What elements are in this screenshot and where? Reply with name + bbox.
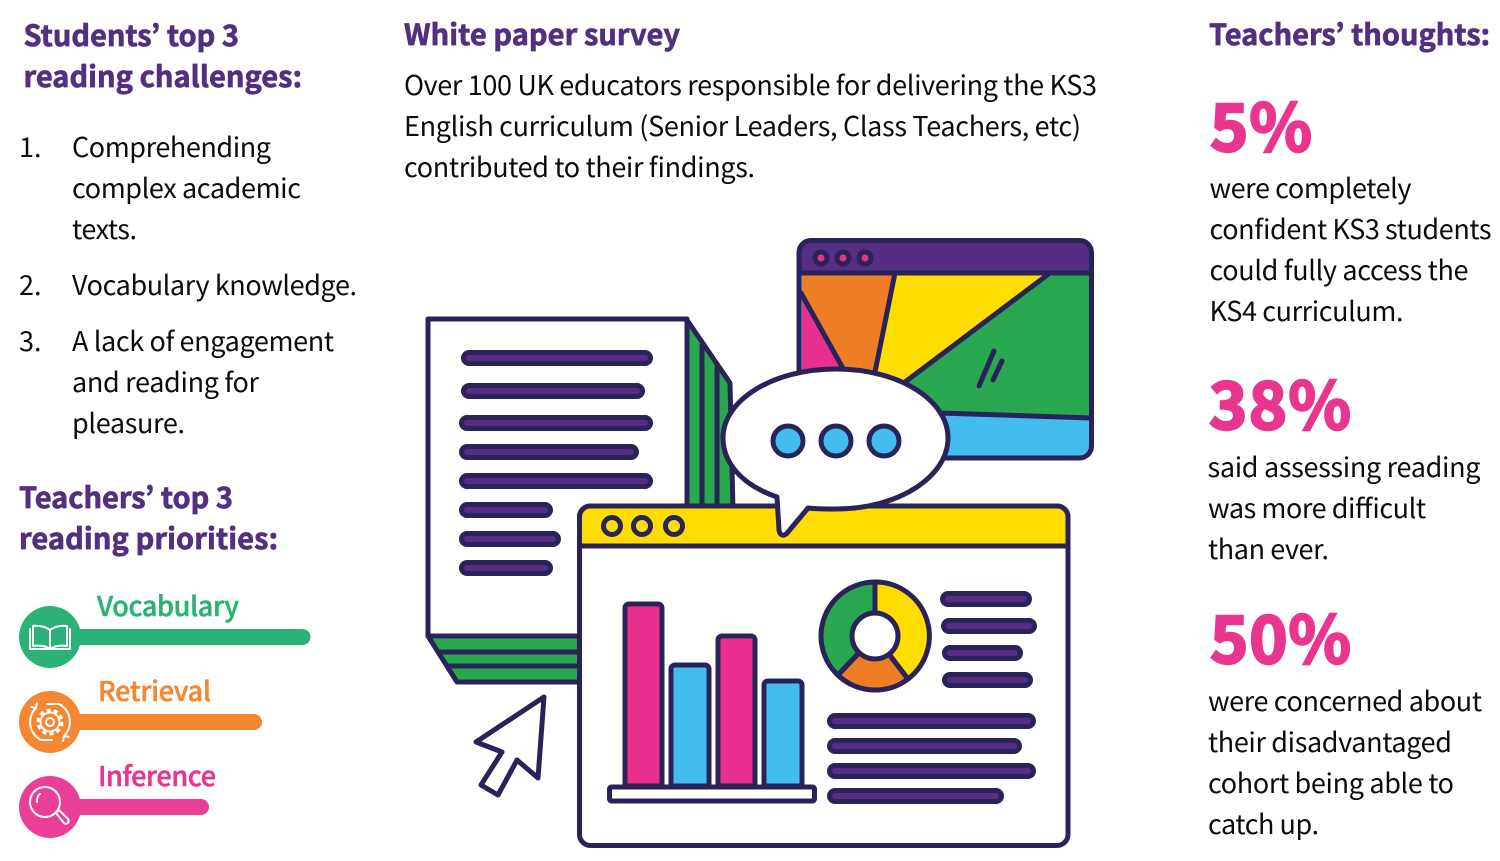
numbered list: reading challenges: complex academic	[72, 167, 301, 206]
dashboard text lines	[835, 599, 1029, 796]
stat: 38 percent: said assessing reading	[1208, 446, 1480, 485]
stat: 50 percent: their disadvantaged	[1208, 721, 1452, 760]
stat: 38 percent	[1208, 354, 1480, 567]
heading: teachers' thoughts: Teachers’ thoughts:	[1209, 12, 1490, 54]
numbered list: reading challenges	[19, 126, 357, 441]
donut chart	[821, 582, 929, 690]
icon: gear with cycle arrows	[30, 703, 70, 741]
priority bar: vocabulary: Vocabulary	[96, 585, 239, 624]
heading: students' challenges	[24, 13, 302, 96]
stat: 5 percent: KS4 curriculum.	[1210, 290, 1404, 329]
heading: teachers' priorities: Teachers’ top 3	[19, 475, 233, 517]
icon: cursor arrow	[476, 697, 544, 795]
text block: survey description: Over 100 UK educators responsible for delivering the KS3	[404, 64, 1097, 103]
priority bar: inference	[19, 755, 216, 838]
stat: 38 percent: was more difficult	[1208, 487, 1426, 526]
heading: students' challenges: reading challenges:	[24, 54, 302, 96]
icon: open book	[30, 626, 70, 649]
icon: magnifying glass	[30, 787, 69, 824]
text block: survey description: English curriculum (Senior Leaders, Class Teachers, etc)	[404, 105, 1081, 144]
stat: 5 percent: could fully access the	[1210, 249, 1468, 288]
stat: 50 percent: cohort being able to	[1208, 762, 1454, 801]
numbered list: reading challenges: Vocabulary knowledge.	[72, 264, 357, 303]
heading: white paper survey: White paper survey	[404, 12, 680, 54]
illustration: survey documents and charts	[428, 240, 1092, 846]
numbered list: reading challenges: pleasure.	[72, 402, 185, 441]
stat: 50 percent: 50%	[1210, 588, 1351, 682]
priority bar: vocabulary	[19, 585, 310, 668]
numbered list: reading challenges: texts.	[72, 208, 137, 247]
window controls	[604, 518, 682, 534]
numbered list: reading challenges: A lack of engagement	[72, 320, 334, 359]
stat: 38 percent: 38%	[1209, 354, 1351, 448]
numbered list: reading challenges: 1.	[19, 126, 42, 165]
numbered list: reading challenges: 3.	[19, 320, 42, 359]
stat: 5 percent	[1210, 76, 1492, 329]
browser window: colourful chart	[799, 240, 1092, 458]
stat: 5 percent: were completely	[1210, 167, 1412, 206]
priority bar: inference: Inference	[98, 755, 216, 794]
priority bar: retrieval	[19, 670, 262, 753]
heading: students' challenges: Students’ top 3	[24, 13, 239, 55]
text block: survey description	[404, 64, 1097, 185]
text block: survey description: contributed to their findings.	[404, 146, 755, 185]
document with stacked pages	[428, 319, 733, 682]
priority bar: retrieval: Retrieval	[98, 670, 211, 709]
speech bubble	[723, 369, 948, 535]
numbered list: reading challenges: and reading for	[72, 361, 260, 400]
numbered list: reading challenges: 2.	[19, 264, 42, 303]
heading: teachers' priorities: reading priorities:	[19, 516, 278, 558]
stat: 5 percent: confident KS3 students	[1210, 208, 1492, 247]
stat: 50 percent: catch up.	[1208, 803, 1319, 842]
stat: 38 percent: than ever.	[1208, 528, 1329, 567]
stat: 5 percent: 5%	[1210, 76, 1312, 170]
heading: teachers' priorities	[19, 475, 278, 558]
numbered list: reading challenges: Comprehending	[72, 126, 271, 165]
stat: 50 percent: were concerned about	[1208, 680, 1482, 719]
bar chart	[610, 604, 814, 801]
stat: 50 percent	[1208, 588, 1482, 842]
browser window: dashboard	[580, 506, 1068, 846]
